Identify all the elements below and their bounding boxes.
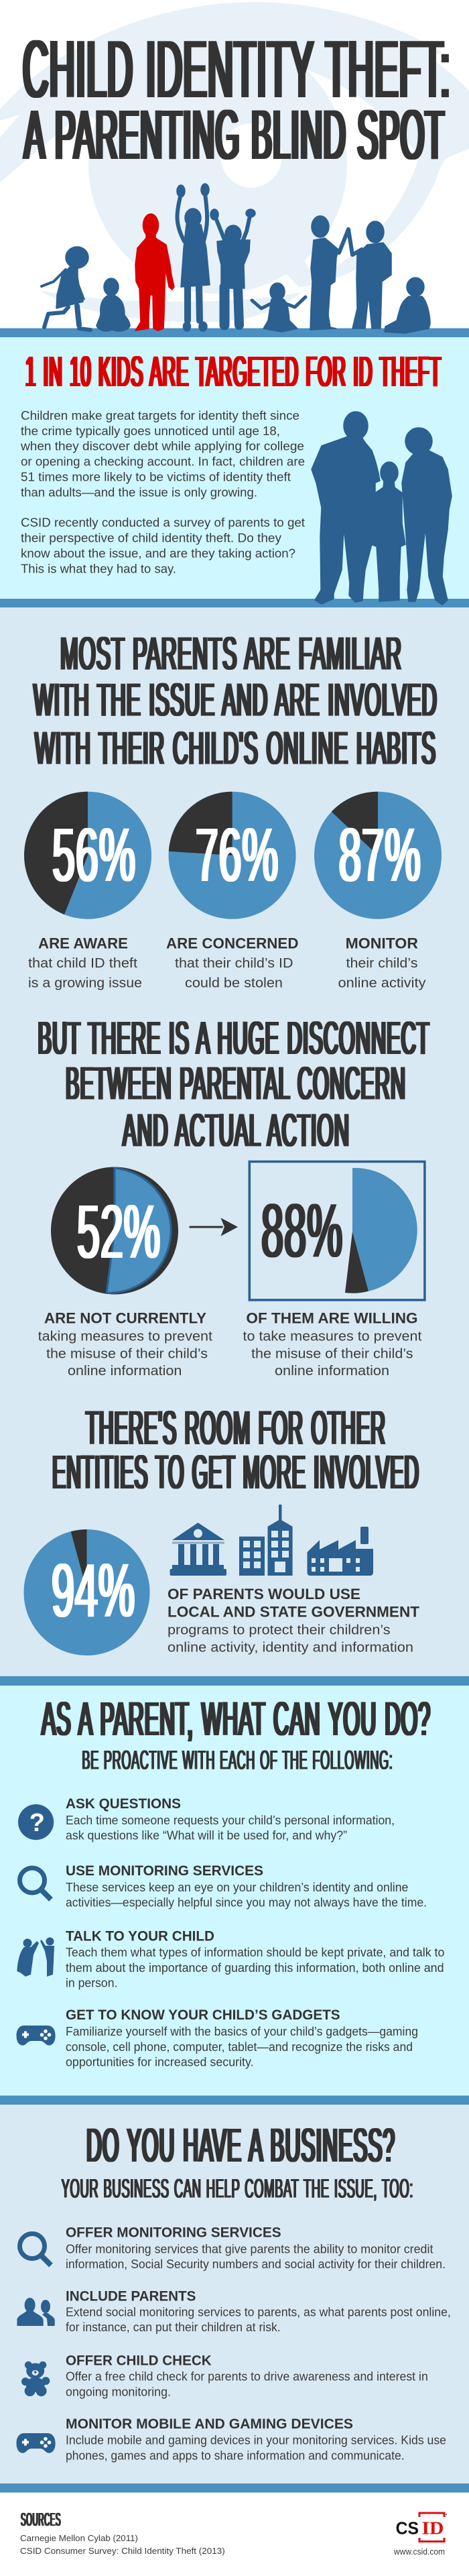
item: include parents bbox=[66, 2288, 451, 2334]
intro text: or opening a checking account. In fact, children are bbox=[21, 455, 305, 469]
label: monitor: online activity bbox=[338, 976, 426, 991]
item: use monitoring services: USE MONITORING SERVICES bbox=[66, 1863, 263, 1879]
panel: footer: SOURCES bbox=[21, 2509, 61, 2530]
item: talk to your child: Teach them what types of information should be kept private, and talk to bbox=[66, 1945, 444, 1959]
label: are not currently: the misuse of their child’s bbox=[46, 1346, 208, 1361]
title bbox=[23, 23, 451, 174]
intro text: Children make great targets for identity theft since bbox=[21, 408, 299, 422]
item: offer monitoring services: information, Social Security numbers and social activity for their children. bbox=[66, 2258, 446, 2271]
label: of them are willing bbox=[243, 1310, 422, 1379]
pie: 56%: 56% bbox=[52, 813, 136, 897]
child sitting bbox=[96, 278, 130, 331]
item: offer child check bbox=[66, 2352, 428, 2398]
intro text: when they discover debt while applying for college bbox=[20, 439, 304, 453]
item: talk to your child: TALK TO YOUR CHILD bbox=[66, 1928, 214, 1944]
panel: 1 in 10 kids bbox=[0, 337, 469, 607]
label: of them are willing: OF THEM ARE WILLING bbox=[246, 1310, 418, 1327]
label: are not currently: taking measures to prevent bbox=[38, 1330, 212, 1344]
icon: magnifier bbox=[20, 1868, 51, 1899]
silhouettes of children bbox=[42, 184, 430, 333]
item: get to know gadgets: Familiarize yourself with the basics of your child’s gadgets—gaming bbox=[66, 2024, 418, 2038]
item: ask questions: ASK QUESTIONS bbox=[66, 1796, 181, 1812]
item: offer monitoring services: Offer monitoring services that give parents the ability to monitor credit bbox=[66, 2242, 433, 2256]
item: ask questions bbox=[66, 1796, 395, 1842]
icon: magnifier bbox=[20, 2234, 51, 2265]
CSID logo: CS bbox=[396, 2518, 419, 2538]
intro text: than adults—and the issue is only growing. bbox=[21, 485, 257, 499]
icon: parent and child bbox=[17, 1938, 54, 1977]
panel: do you have a business bbox=[0, 2105, 469, 2493]
item: ask questions: ask questions like “What will it be used for, and why?” bbox=[66, 1828, 347, 1842]
heading: other entities bbox=[52, 1402, 419, 1499]
label: are concerned: ARE CONCERNED bbox=[166, 935, 299, 952]
icon: factory bbox=[307, 1527, 373, 1576]
pie: 52%: 52% bbox=[77, 1189, 161, 1274]
divider band bbox=[0, 2483, 469, 2493]
divider band bbox=[0, 599, 469, 607]
icon: two parents bbox=[17, 2298, 55, 2326]
CSID logo: ID bbox=[422, 2518, 444, 2538]
CSID logo: www.csid.com bbox=[393, 2546, 445, 2557]
item: include parents: Extend social monitoring services to parents, as what parents post online, bbox=[66, 2305, 451, 2319]
pie: 76% bbox=[169, 792, 296, 919]
eye background illustration bbox=[0, 2, 469, 322]
icon: question mark: ? bbox=[29, 1809, 45, 1837]
item: monitor mobile and gaming devices: phones, games and apps to share information and communicate. bbox=[66, 2449, 405, 2462]
pie: 87% bbox=[314, 792, 442, 919]
label: are aware: is a growing issue bbox=[28, 976, 142, 991]
text: local and state government: online activity, identity and information bbox=[168, 1640, 413, 1655]
divider band bbox=[0, 2096, 469, 2105]
child running bbox=[42, 247, 90, 330]
item: talk to your child bbox=[66, 1928, 444, 1990]
label: are aware bbox=[28, 935, 142, 991]
text: local and state government: OF PARENTS WOULD USE bbox=[168, 1586, 360, 1602]
label: monitor: MONITOR bbox=[346, 935, 418, 952]
CSID logo bbox=[393, 2513, 447, 2557]
item: monitor mobile and gaming devices bbox=[66, 2416, 446, 2462]
panel: footer bbox=[0, 2493, 469, 2576]
intro text: CSID recently conducted a survey of parents to get bbox=[21, 515, 305, 529]
box: 88%: 88% bbox=[261, 1189, 343, 1273]
pie: 52% bbox=[51, 1167, 178, 1294]
baby sitting with arms out bbox=[252, 283, 306, 332]
label: of them are willing: online information bbox=[275, 1364, 389, 1379]
text: local and state government bbox=[168, 1586, 420, 1655]
sources list: Carnegie Mellon Cylab (2011) bbox=[20, 2533, 138, 2543]
item: offer child check: ongoing monitoring. bbox=[66, 2385, 171, 2398]
item: talk to your child: them about the importance of guarding this information, both online and bbox=[66, 1960, 444, 1975]
icon: teddy bear bbox=[21, 2361, 50, 2396]
item: get to know gadgets: opportunities for increased security. bbox=[66, 2055, 254, 2069]
label: are not currently: online information bbox=[68, 1364, 182, 1379]
item: get to know gadgets bbox=[66, 2007, 418, 2069]
boy with raised arms bbox=[210, 209, 255, 325]
icon: game controller bbox=[16, 2026, 56, 2046]
panel: as a parent bbox=[0, 1686, 469, 2105]
sources list bbox=[20, 2533, 225, 2556]
item: offer child check: OFFER CHILD CHECK bbox=[66, 2352, 212, 2368]
panel: survey results bbox=[0, 607, 469, 1686]
label: are concerned: could be stolen bbox=[185, 976, 283, 991]
sources list: CSID Consumer Survey: Child Identity Theft (2013) bbox=[20, 2546, 225, 2556]
item: include parents: for instance, can put their children at risk. bbox=[66, 2321, 281, 2334]
text: local and state government: LOCAL AND STATE GOVERNMENT bbox=[168, 1604, 420, 1621]
label: are concerned bbox=[166, 935, 299, 991]
item: offer monitoring services: OFFER MONITORING SERVICES bbox=[66, 2225, 281, 2241]
label: of them are willing: to take measures to prevent bbox=[243, 1330, 422, 1344]
divider band bbox=[0, 1676, 469, 1686]
icon: question mark bbox=[18, 1804, 54, 1840]
label: of them are willing: the misuse of their child’s bbox=[251, 1346, 413, 1361]
child in red bbox=[135, 214, 174, 331]
intro text: This is what they had to say. bbox=[21, 561, 176, 575]
toddler sitting bbox=[385, 278, 430, 333]
pie: 56% bbox=[24, 792, 151, 919]
panel: hero bbox=[0, 0, 469, 337]
pie: 94%: 94% bbox=[52, 1548, 135, 1633]
item: use monitoring services: activities—especially helpful since you may not always have the time. bbox=[66, 1895, 427, 1910]
label: monitor bbox=[338, 935, 426, 991]
item: offer child check: Offer a free child check for parents to drive awareness and interest in bbox=[66, 2369, 428, 2383]
item: talk to your child: in person. bbox=[66, 1976, 117, 1990]
divider band bbox=[0, 329, 469, 337]
heading: disconnect bbox=[38, 1012, 430, 1156]
item: use monitoring services bbox=[66, 1863, 427, 1910]
intro text bbox=[20, 408, 305, 575]
intro text: know about the issue, and are they taking action? bbox=[21, 546, 295, 560]
item: ask questions: Each time someone requests your child’s personal information, bbox=[66, 1813, 395, 1827]
boys high five bbox=[310, 216, 391, 330]
intro text: their perspective of child identity theft. Do they bbox=[21, 530, 282, 544]
icon: city buildings bbox=[239, 1505, 293, 1576]
item: monitor mobile and gaming devices: MONITOR MOBILE AND GAMING DEVICES bbox=[66, 2416, 353, 2432]
girl with raised arms bbox=[177, 184, 210, 331]
text: local and state government: programs to protect their children’s bbox=[168, 1623, 391, 1637]
item: get to know gadgets: console, cell phone, computer, tablet—and recognize the risks and bbox=[66, 2040, 413, 2054]
label: are aware: that child ID theft bbox=[28, 956, 137, 971]
intro text: the crime typically goes unnoticed until age 18, bbox=[21, 424, 280, 438]
label: are aware: ARE AWARE bbox=[38, 935, 128, 952]
item: use monitoring services: These services keep an eye on your children’s identity and online bbox=[66, 1880, 408, 1894]
pie: 76%: 76% bbox=[196, 813, 279, 897]
icon: game controller bbox=[16, 2433, 56, 2453]
label: monitor: their child’s bbox=[346, 956, 418, 971]
item: get to know gadgets: GET TO KNOW YOUR CHILD’S GADGETS bbox=[66, 2007, 340, 2023]
item: monitor mobile and gaming devices: Include mobile and gaming devices in your monitoring services. Kids use bbox=[66, 2434, 446, 2447]
item: include parents: INCLUDE PARENTS bbox=[66, 2288, 196, 2304]
pie: 94% bbox=[24, 1529, 150, 1655]
family silhouette bbox=[312, 412, 452, 605]
arrow bbox=[190, 1218, 238, 1236]
label: are not currently: ARE NOT CURRENTLY bbox=[44, 1310, 206, 1327]
box: 88% bbox=[249, 1161, 425, 1300]
label: are concerned: that their child’s ID bbox=[175, 956, 293, 971]
heading: most parents bbox=[34, 628, 438, 774]
item: offer monitoring services bbox=[66, 2225, 446, 2271]
intro text: 51 times more likely to be victims of identity theft bbox=[21, 469, 291, 483]
label: are not currently bbox=[38, 1310, 212, 1379]
icon: government building bbox=[170, 1523, 226, 1576]
